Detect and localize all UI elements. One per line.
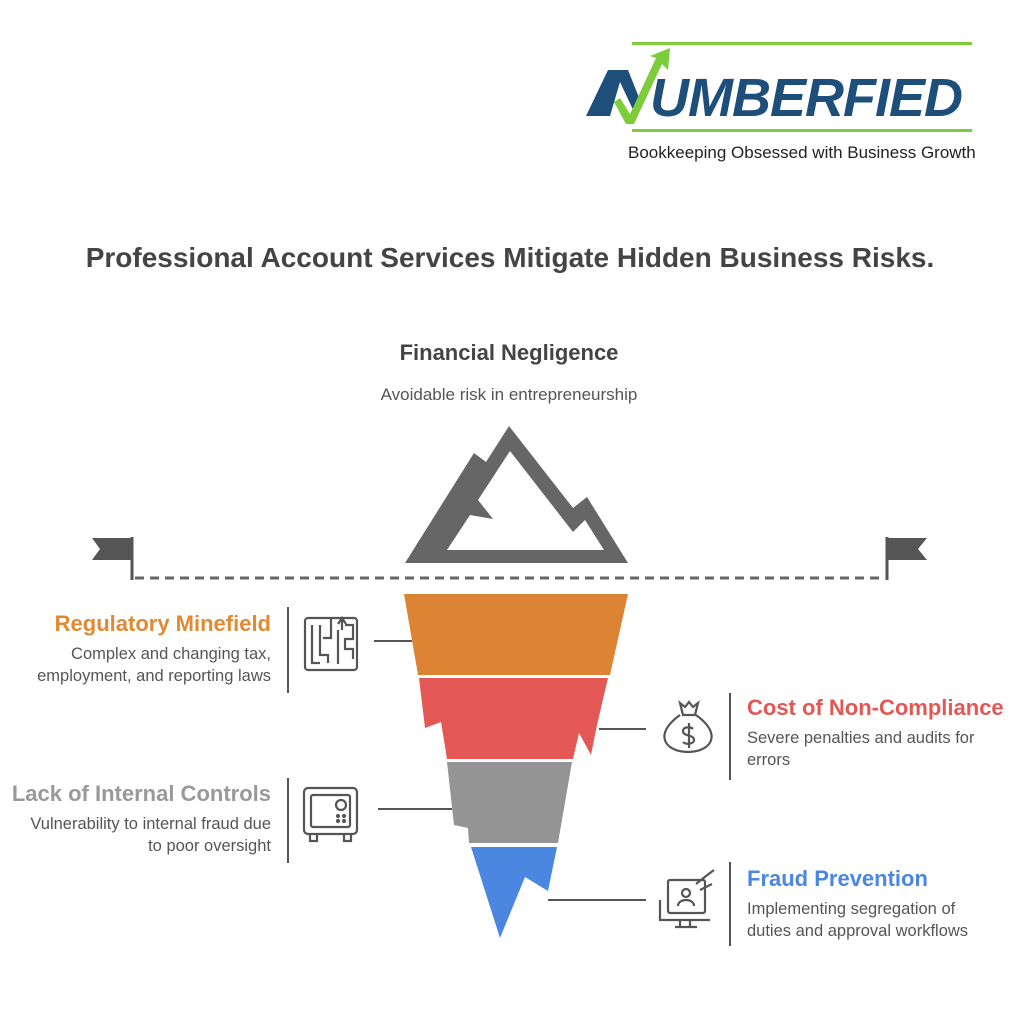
text: Cost of Non-Compliance: Cost of Non-Compliance (747, 695, 1004, 720)
logo lines (632, 42, 972, 132)
text: Regulatory Minefield: Complex and changing tax, (71, 645, 271, 663)
text: Fraud Prevention: Fraud Prevention (747, 866, 928, 891)
text: Fraud Prevention (747, 866, 968, 940)
tagline: Bookkeeping Obsessed with Business Growth (628, 143, 976, 162)
text: Lack of Internal Controls: Vulnerability to internal fraud due (30, 815, 271, 833)
logo word: UMBERFIED (650, 68, 962, 128)
text: Lack of Internal Controls: Lack of Internal Controls (12, 781, 271, 806)
text: Fraud Prevention: duties and approval workflows (747, 922, 968, 940)
icon: money bag (664, 702, 712, 752)
layer: gray (447, 762, 572, 843)
flags and waterline (92, 537, 927, 580)
text: Fraud Prevention: Implementing segregation of (747, 900, 955, 918)
layer: blue (471, 847, 557, 938)
layer: orange (404, 594, 628, 675)
icon: maze (305, 618, 357, 670)
layer: red (419, 678, 608, 759)
text: Cost of Non-Compliance (747, 695, 1004, 769)
text: Regulatory Minefield (37, 611, 271, 685)
heading: Financial Negligence: Financial Negligence (400, 340, 618, 365)
connectors (288, 607, 730, 946)
text: Cost of Non-Compliance: Severe penalties and audits for (747, 729, 974, 747)
text: Regulatory Minefield: Regulatory Minefield (55, 611, 271, 636)
subtext: Avoidable risk in entrepreneurship (381, 385, 637, 404)
icon: safe (304, 788, 357, 841)
text: Lack of Internal Controls (12, 781, 271, 855)
text: Lack of Internal Controls: to poor oversight (148, 837, 271, 855)
icon: mountain (405, 426, 628, 563)
icon: monitor (660, 870, 714, 927)
title: Professional Account Services Mitigate Hidden Business Risks. (86, 242, 934, 273)
logo N mark (586, 48, 670, 124)
logo (586, 42, 976, 162)
text: Regulatory Minefield: employment, and reporting laws (37, 667, 271, 685)
text: Cost of Non-Compliance: errors (747, 751, 790, 769)
